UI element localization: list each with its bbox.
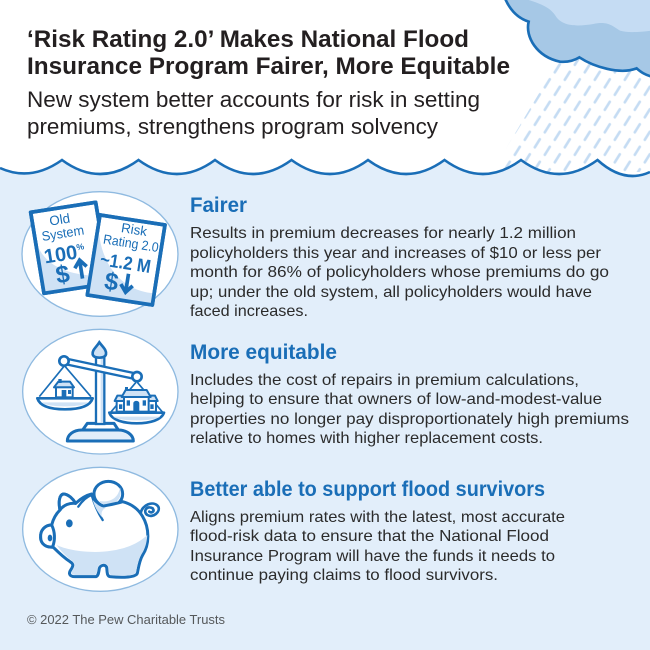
text: fairer body	[190, 225, 609, 320]
document: old system: System	[41, 223, 85, 244]
document: old system: $	[54, 261, 72, 290]
text: more equitable body: properties no longer pay disproportionately high premiums	[190, 411, 629, 428]
subtitle: New system better accounts for risk in setting	[27, 87, 480, 112]
text: better able body: continue paying claims to flood survivors.	[190, 567, 498, 584]
icon: piggy bank	[23, 467, 178, 591]
title	[27, 26, 510, 80]
heading: fairer: Fairer	[190, 194, 247, 217]
document: risk rating 2.0	[87, 215, 165, 305]
pig tail	[141, 504, 159, 516]
text: better able body	[190, 509, 565, 584]
text: fairer body: faced increases.	[190, 303, 308, 320]
left pan with small house	[37, 366, 93, 409]
document: old system: 100	[43, 242, 79, 268]
text: fairer body: policyholders this year and increases of $10 or less per	[190, 245, 602, 262]
heading: better able to support flood survivors: Better able to support flood survivors	[190, 478, 545, 501]
pig belly shading	[57, 535, 147, 576]
text: better able body: Insurance Program will have the funds it needs to	[190, 548, 555, 565]
document: risk rating 2.0: ~1.2 M	[99, 248, 152, 277]
scale beam	[64, 361, 137, 377]
text: more equitable body: relative to homes with higher replacement costs.	[190, 430, 543, 447]
text: more equitable body	[190, 372, 629, 447]
pig ear and slot	[78, 495, 103, 520]
subtitle: premiums, strengthens program solvency	[27, 114, 438, 139]
document: risk rating 2.0: Rating 2.0	[102, 232, 160, 255]
icon: balance scale with houses	[23, 329, 178, 454]
icon: rain	[504, 58, 650, 172]
text: fairer body: up; under the old system, all policyholders would have	[190, 284, 592, 301]
wave line	[0, 160, 650, 176]
document: old system: %	[76, 241, 85, 252]
footer: copyright: © 2022 The Pew Charitable Trusts	[27, 612, 225, 627]
scale base	[83, 423, 118, 430]
title: ‘Risk Rating 2.0’ Makes National Flood	[27, 26, 469, 53]
background: water panel	[0, 160, 650, 650]
document: risk rating 2.0: Risk	[120, 220, 148, 239]
right pan with large house	[109, 382, 164, 423]
text: fairer body: Results in premium decreases for nearly 1.2 million	[190, 225, 576, 242]
text: fairer body: month for 86% of policyholders whose premiums do go	[190, 264, 609, 281]
coin	[94, 481, 123, 507]
title: Insurance Program Fairer, More Equitable	[27, 53, 510, 80]
document: old system	[31, 202, 109, 293]
document: old system: Old	[48, 211, 71, 229]
text: better able body: flood-risk data to ensure that the National Flood	[190, 528, 549, 545]
pig eye	[66, 519, 73, 527]
document: risk rating 2.0: $	[102, 268, 120, 297]
scale post	[96, 357, 104, 424]
text: more equitable body: helping to ensure that owners of low-and-modest-value	[190, 391, 602, 408]
icon: old system vs risk rating documents	[22, 192, 178, 316]
text: more equitable body: Includes the cost of repairs in premium calculations,	[190, 372, 579, 389]
icon: cloud	[505, 0, 650, 77]
subtitle	[27, 87, 480, 139]
heading: more equitable: More equitable	[190, 341, 337, 364]
pig snout	[41, 525, 54, 547]
pig body	[41, 494, 148, 577]
text: better able body: Aligns premium rates with the latest, most accurate	[190, 509, 565, 526]
